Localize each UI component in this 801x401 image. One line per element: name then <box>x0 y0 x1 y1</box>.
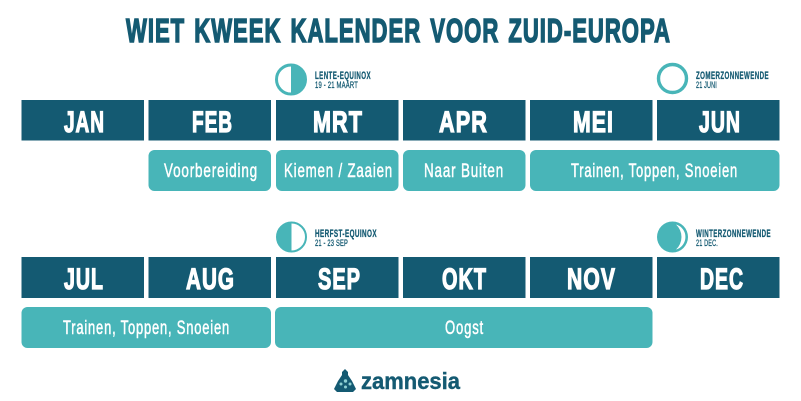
activity: harvest: Oogst <box>445 317 484 339</box>
icon: spring equinox half circle <box>276 65 306 94</box>
activity row: first half of the year <box>148 150 780 191</box>
month: March: MRT <box>313 106 363 139</box>
month: August <box>148 257 271 298</box>
month: March <box>276 100 398 140</box>
month: January <box>22 100 144 140</box>
activity: germinating and sowing: Kiemen / Zaaien <box>284 160 393 182</box>
month: August: AUG <box>186 263 235 296</box>
month row: first half of the year <box>22 100 780 140</box>
activity: training, topping, pruning: Trainen, Toppen, Snoeien <box>63 317 230 339</box>
activity: training, topping, pruning <box>530 150 780 191</box>
label: autumn equinox <box>315 228 377 249</box>
month: December <box>657 257 780 298</box>
icon: zamnesia emblem <box>334 369 356 392</box>
month: December: DEC <box>700 263 744 296</box>
logo: zamnesia <box>334 368 460 394</box>
label: summer solstice <box>696 70 769 91</box>
label: spring equinox <box>315 70 371 91</box>
icon: summer solstice ring <box>658 64 686 92</box>
label: spring equinox: 19 - 21 MAART <box>315 80 358 91</box>
month: May: MEI <box>573 106 614 139</box>
wordmark: zamnesia <box>361 368 460 394</box>
month row: second half of the year <box>22 257 780 298</box>
activity: training, topping, pruning <box>22 307 271 348</box>
month: January: JAN <box>64 106 105 139</box>
month: June: JUN <box>699 106 741 139</box>
month: February: FEB <box>192 106 233 139</box>
activity: moving outdoors: Naar Buiten <box>424 160 504 182</box>
month: July <box>22 257 144 298</box>
month: October: OKT <box>442 263 487 296</box>
month: April <box>403 100 526 140</box>
activity: germinating and sowing <box>276 150 398 191</box>
month: April: APR <box>439 106 488 139</box>
activity: preparation <box>148 150 271 191</box>
label: autumn equinox: 21 - 23 SEP <box>315 238 348 249</box>
label: winter solstice: 21 DEC. <box>696 238 718 249</box>
icon: winter solstice crescent <box>657 222 688 252</box>
activity: preparation: Voorbereiding <box>164 160 258 182</box>
label: summer solstice: 21 JUNI <box>696 80 717 91</box>
month: September <box>276 257 398 298</box>
label: spring equinox: LENTE-EQUINOX <box>315 70 371 82</box>
activity row: second half of the year <box>22 307 652 348</box>
month: May <box>530 100 652 140</box>
label: winter solstice <box>696 228 771 249</box>
label: autumn equinox: HERFST-EQUINOX <box>315 228 377 240</box>
month: July: JUL <box>64 263 104 296</box>
activity: moving outdoors <box>403 150 526 191</box>
icon: autumn equinox half circle <box>276 222 306 252</box>
activity: harvest <box>275 307 652 348</box>
month: November <box>530 257 652 298</box>
month: October <box>403 257 526 298</box>
month: September: SEP <box>318 263 361 296</box>
month: June <box>657 100 780 140</box>
month: November: NOV <box>567 263 616 296</box>
month: February <box>148 100 271 140</box>
